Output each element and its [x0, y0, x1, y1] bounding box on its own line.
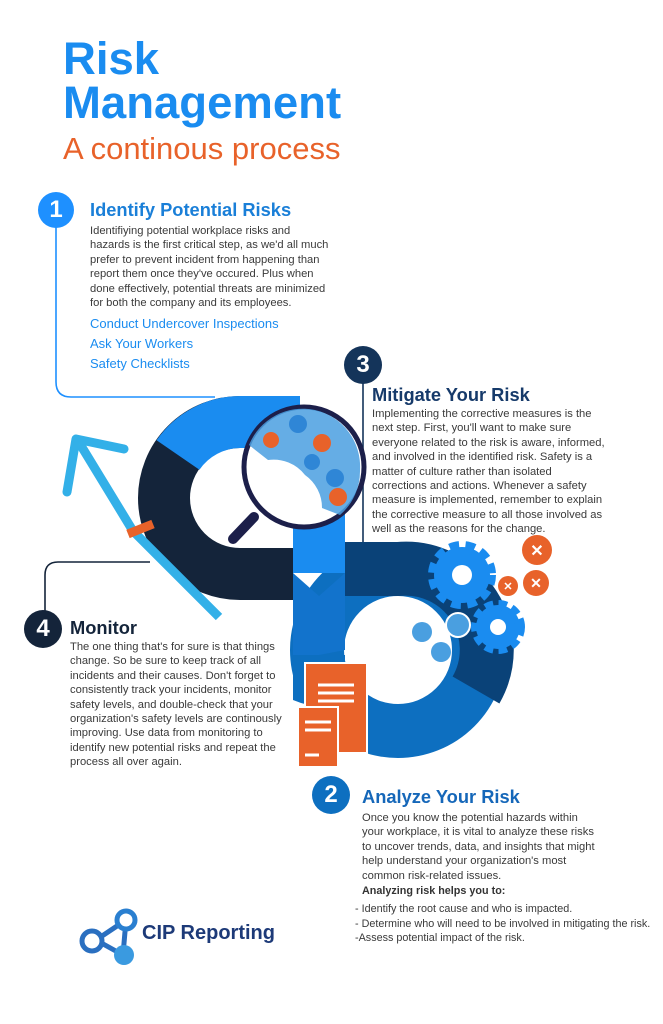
analyzing list: Analyzing risk helps you to:: [362, 885, 505, 897]
text 3: next step. First, you'll want to make sure: [372, 422, 571, 434]
text 1: done effectively, potential threats are minimized: [90, 283, 325, 295]
text 2: to uncover trends, data, and insights that might: [362, 841, 595, 853]
upper ring: [164, 422, 300, 574]
title: Risk: [63, 33, 159, 84]
subtitle: A continous process: [63, 131, 340, 166]
text 3: [372, 408, 605, 535]
arrow: [67, 439, 219, 617]
text 4: change. So be sure to keep track of all: [70, 655, 261, 667]
text 2: your workplace, it is vital to analyze these risks: [362, 826, 594, 838]
title: Management: [63, 77, 341, 128]
heading 4: Monitor: [70, 617, 137, 638]
lower loop: [317, 569, 487, 731]
text 4: The one thing that's for sure is that things: [70, 641, 275, 653]
analyzing list: [355, 885, 650, 944]
number 4: 4: [36, 615, 50, 642]
text 4: organization's safety levels are continously: [70, 713, 282, 725]
links: Safety Checklists: [90, 356, 190, 371]
text 4: improving. Use data from monitoring to: [70, 727, 263, 739]
stem: [293, 440, 345, 707]
links: Ask Your Workers: [90, 336, 193, 351]
text 3: everyone related to the risk is aware, informed,: [372, 437, 605, 449]
connector line step 4: [45, 562, 150, 612]
text 2: help understand your organization's most: [362, 855, 566, 867]
text 2: Once you know the potential hazards within: [362, 812, 578, 824]
number 2: 2: [324, 781, 338, 808]
number 3: [344, 346, 382, 384]
text 1: [90, 225, 328, 309]
title: [63, 33, 341, 128]
magnifier: [233, 407, 364, 539]
heading 3: Mitigate Your Risk: [372, 384, 530, 405]
text 3: the corrective measure to all those involved as: [372, 509, 602, 521]
heading 2: Analyze Your Risk: [362, 786, 520, 807]
logo icon: [80, 908, 138, 965]
text 4: [70, 641, 282, 768]
status icons: ✕: [530, 543, 544, 560]
step 2: [312, 776, 650, 944]
number 4: [24, 610, 62, 648]
status icons: ✕: [530, 575, 542, 591]
analyzing list: - Identify the root cause and who is impacted.: [355, 903, 572, 915]
text 1: hazards is the first critical step, as we'd all much: [90, 239, 328, 251]
text 1: for both the company and its employees.: [90, 297, 292, 309]
text 2: [362, 812, 595, 882]
text 3: measure is implemented, remember to explain: [372, 494, 602, 506]
analyzing list: - Determine who will need to be involved in mitigating the risk.: [355, 918, 650, 930]
text 1: Identifiying potential workplace risks and: [90, 225, 290, 237]
text 3: and involved in the identified risk. Safety is a: [372, 451, 592, 463]
text 1: prefer to prevent incident from happening than: [90, 254, 320, 266]
text 2: common risk-related issues.: [362, 870, 501, 882]
text 3: well as the reasons for the change.: [372, 523, 546, 535]
text 4: incidents and their causes. Don't forget to: [70, 670, 276, 682]
text 1: report them once they've occured. Plus when: [90, 268, 314, 280]
logo text: CIP Reporting: [142, 922, 275, 944]
text 3: corrections and actions. Whenever a safety: [372, 480, 587, 492]
text 4: process all over again.: [70, 756, 182, 768]
analyzing list: -Assess potential impact of the risk.: [355, 932, 525, 944]
text 4: identify new potential risks and repeat the: [70, 742, 276, 754]
connector line step 3: [362, 380, 364, 558]
status icons: ✕: [503, 581, 513, 593]
links: Conduct Undercover Inspections: [90, 316, 279, 331]
status icons: [412, 535, 552, 662]
step 1: [38, 192, 328, 371]
text 3: Implementing the corrective measures is the: [372, 408, 592, 420]
step 4: [24, 610, 282, 768]
number 1: [38, 192, 74, 228]
number 1: 1: [49, 196, 63, 223]
number 2: [312, 776, 350, 814]
gears: [434, 547, 520, 649]
heading 1: Identify Potential Risks: [90, 199, 291, 220]
text 4: safety levels, and double-check that your: [70, 699, 273, 711]
number 3: 3: [356, 351, 370, 378]
links: [90, 316, 279, 371]
text 3: matter of culture rather than isolated: [372, 466, 552, 478]
connector line step 1: [56, 225, 215, 397]
documents: [298, 663, 367, 767]
text 4: consistently track your incidents, monitor: [70, 684, 271, 696]
logo: [80, 908, 275, 965]
step 3: [344, 346, 605, 535]
